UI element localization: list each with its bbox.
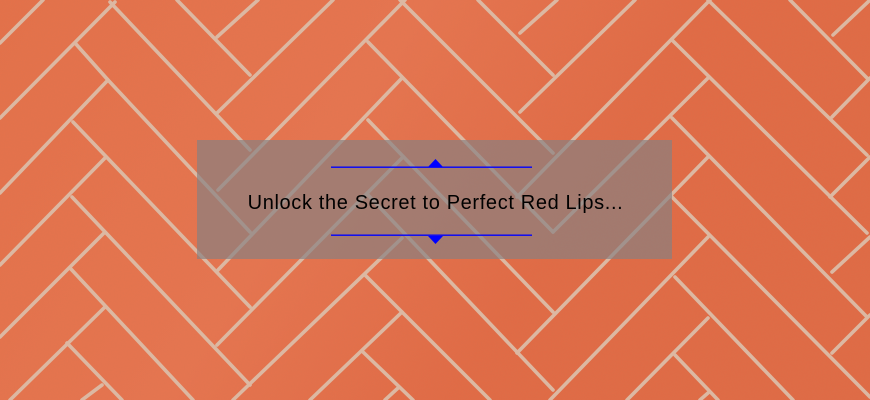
title text: Unlock the Secret to Perfect Red Lips... [248, 192, 623, 214]
panel: translucent grey title band [197, 140, 672, 259]
ornament: top blue line with up triangle [331, 159, 532, 168]
ornament: bottom blue line with down triangle [331, 234, 532, 244]
